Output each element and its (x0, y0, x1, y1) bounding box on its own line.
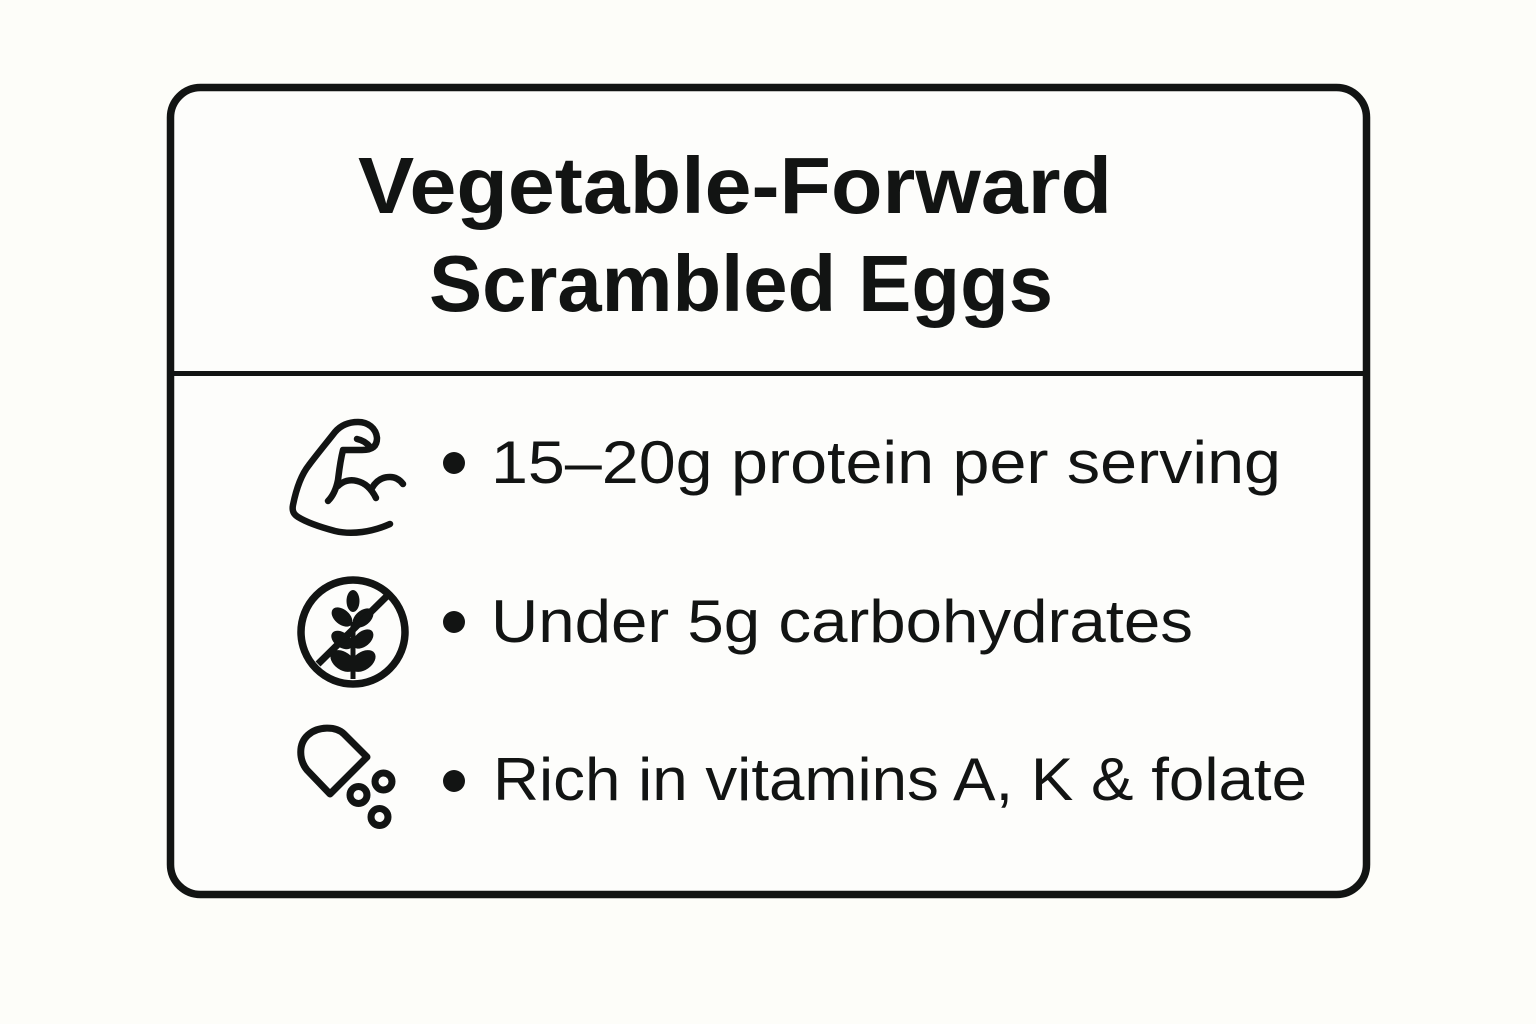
title (358, 141, 1112, 328)
icon: no grain (301, 580, 405, 684)
icon: pill and vitamins (301, 728, 392, 826)
title: Scrambled Eggs (429, 239, 1053, 328)
bullet text: protein: 15–20g protein per serving (491, 429, 1281, 496)
bullet text: vitamins: Rich in vitamins A, K & folate (493, 746, 1307, 813)
title: Vegetable-Forward (358, 141, 1112, 230)
icon: flexed muscle arm (293, 422, 403, 533)
bullet text: carbohydrates: Under 5g carbohydrates (491, 588, 1193, 655)
panel: card (170, 88, 1366, 894)
